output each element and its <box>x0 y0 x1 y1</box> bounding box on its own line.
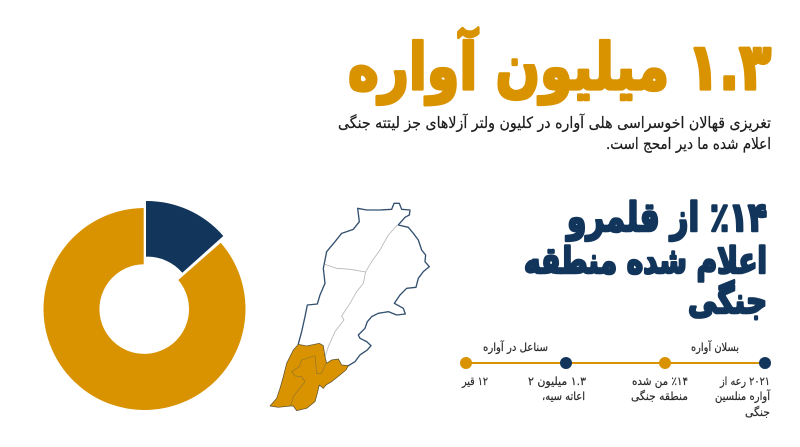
heading: 14% of territory: ٪۱۴ از قلمرو <box>565 195 767 241</box>
donut segment: 14% <box>146 201 223 273</box>
timeline group label: right: بسلان آواره <box>691 340 739 355</box>
timeline dot 3 <box>560 357 572 369</box>
timeline item 1: جنگی <box>745 405 770 419</box>
timeline item 3: اعاته سیه، <box>542 389 585 403</box>
map of Lebanon <box>270 203 429 411</box>
subtitle text block: اعلام شده ما دیر امحج است. <box>606 135 771 153</box>
timeline item 2: ٪۱۴ من شده <box>632 374 688 389</box>
heading: 14% of territory: جنگی <box>688 280 767 322</box>
timeline item 2 <box>631 374 688 403</box>
subtitle text block <box>338 113 771 153</box>
timeline item 3: ۱.۳ میلیون ۲ <box>528 374 586 389</box>
timeline line <box>466 362 765 364</box>
subtitle text block: تغریزی قهالان اخوسراسی هلی آواره در کلیون ولتر آزلاهای جز لیتته جنگی <box>338 113 771 133</box>
timeline item 1: ۲۰۲۱ رعه از <box>719 374 770 389</box>
timeline <box>460 340 771 419</box>
title: ۱.۳ میلیون آواره <box>348 27 771 105</box>
timeline dot 1 <box>759 357 771 369</box>
heading: 14% of territory <box>524 195 767 322</box>
map: highlighted southern conflict zone <box>270 343 348 411</box>
map: internal borders <box>325 225 397 357</box>
map: country outline <box>298 203 429 387</box>
timeline dot 4 <box>460 357 472 369</box>
donut chart <box>44 201 246 410</box>
timeline item 1 <box>715 374 771 419</box>
timeline item 1: آواره منلسین <box>715 389 771 404</box>
timeline item 2: منطقه جنگی <box>631 389 688 403</box>
timeline group label: left: سناعل در آواره <box>483 340 548 355</box>
timeline item 4: ۱۲ قیر <box>461 374 488 389</box>
timeline dot 2 <box>659 357 671 369</box>
donut segment: remaining 86% <box>44 208 246 410</box>
timeline item 3 <box>528 374 586 403</box>
map: district borders <box>291 356 326 406</box>
